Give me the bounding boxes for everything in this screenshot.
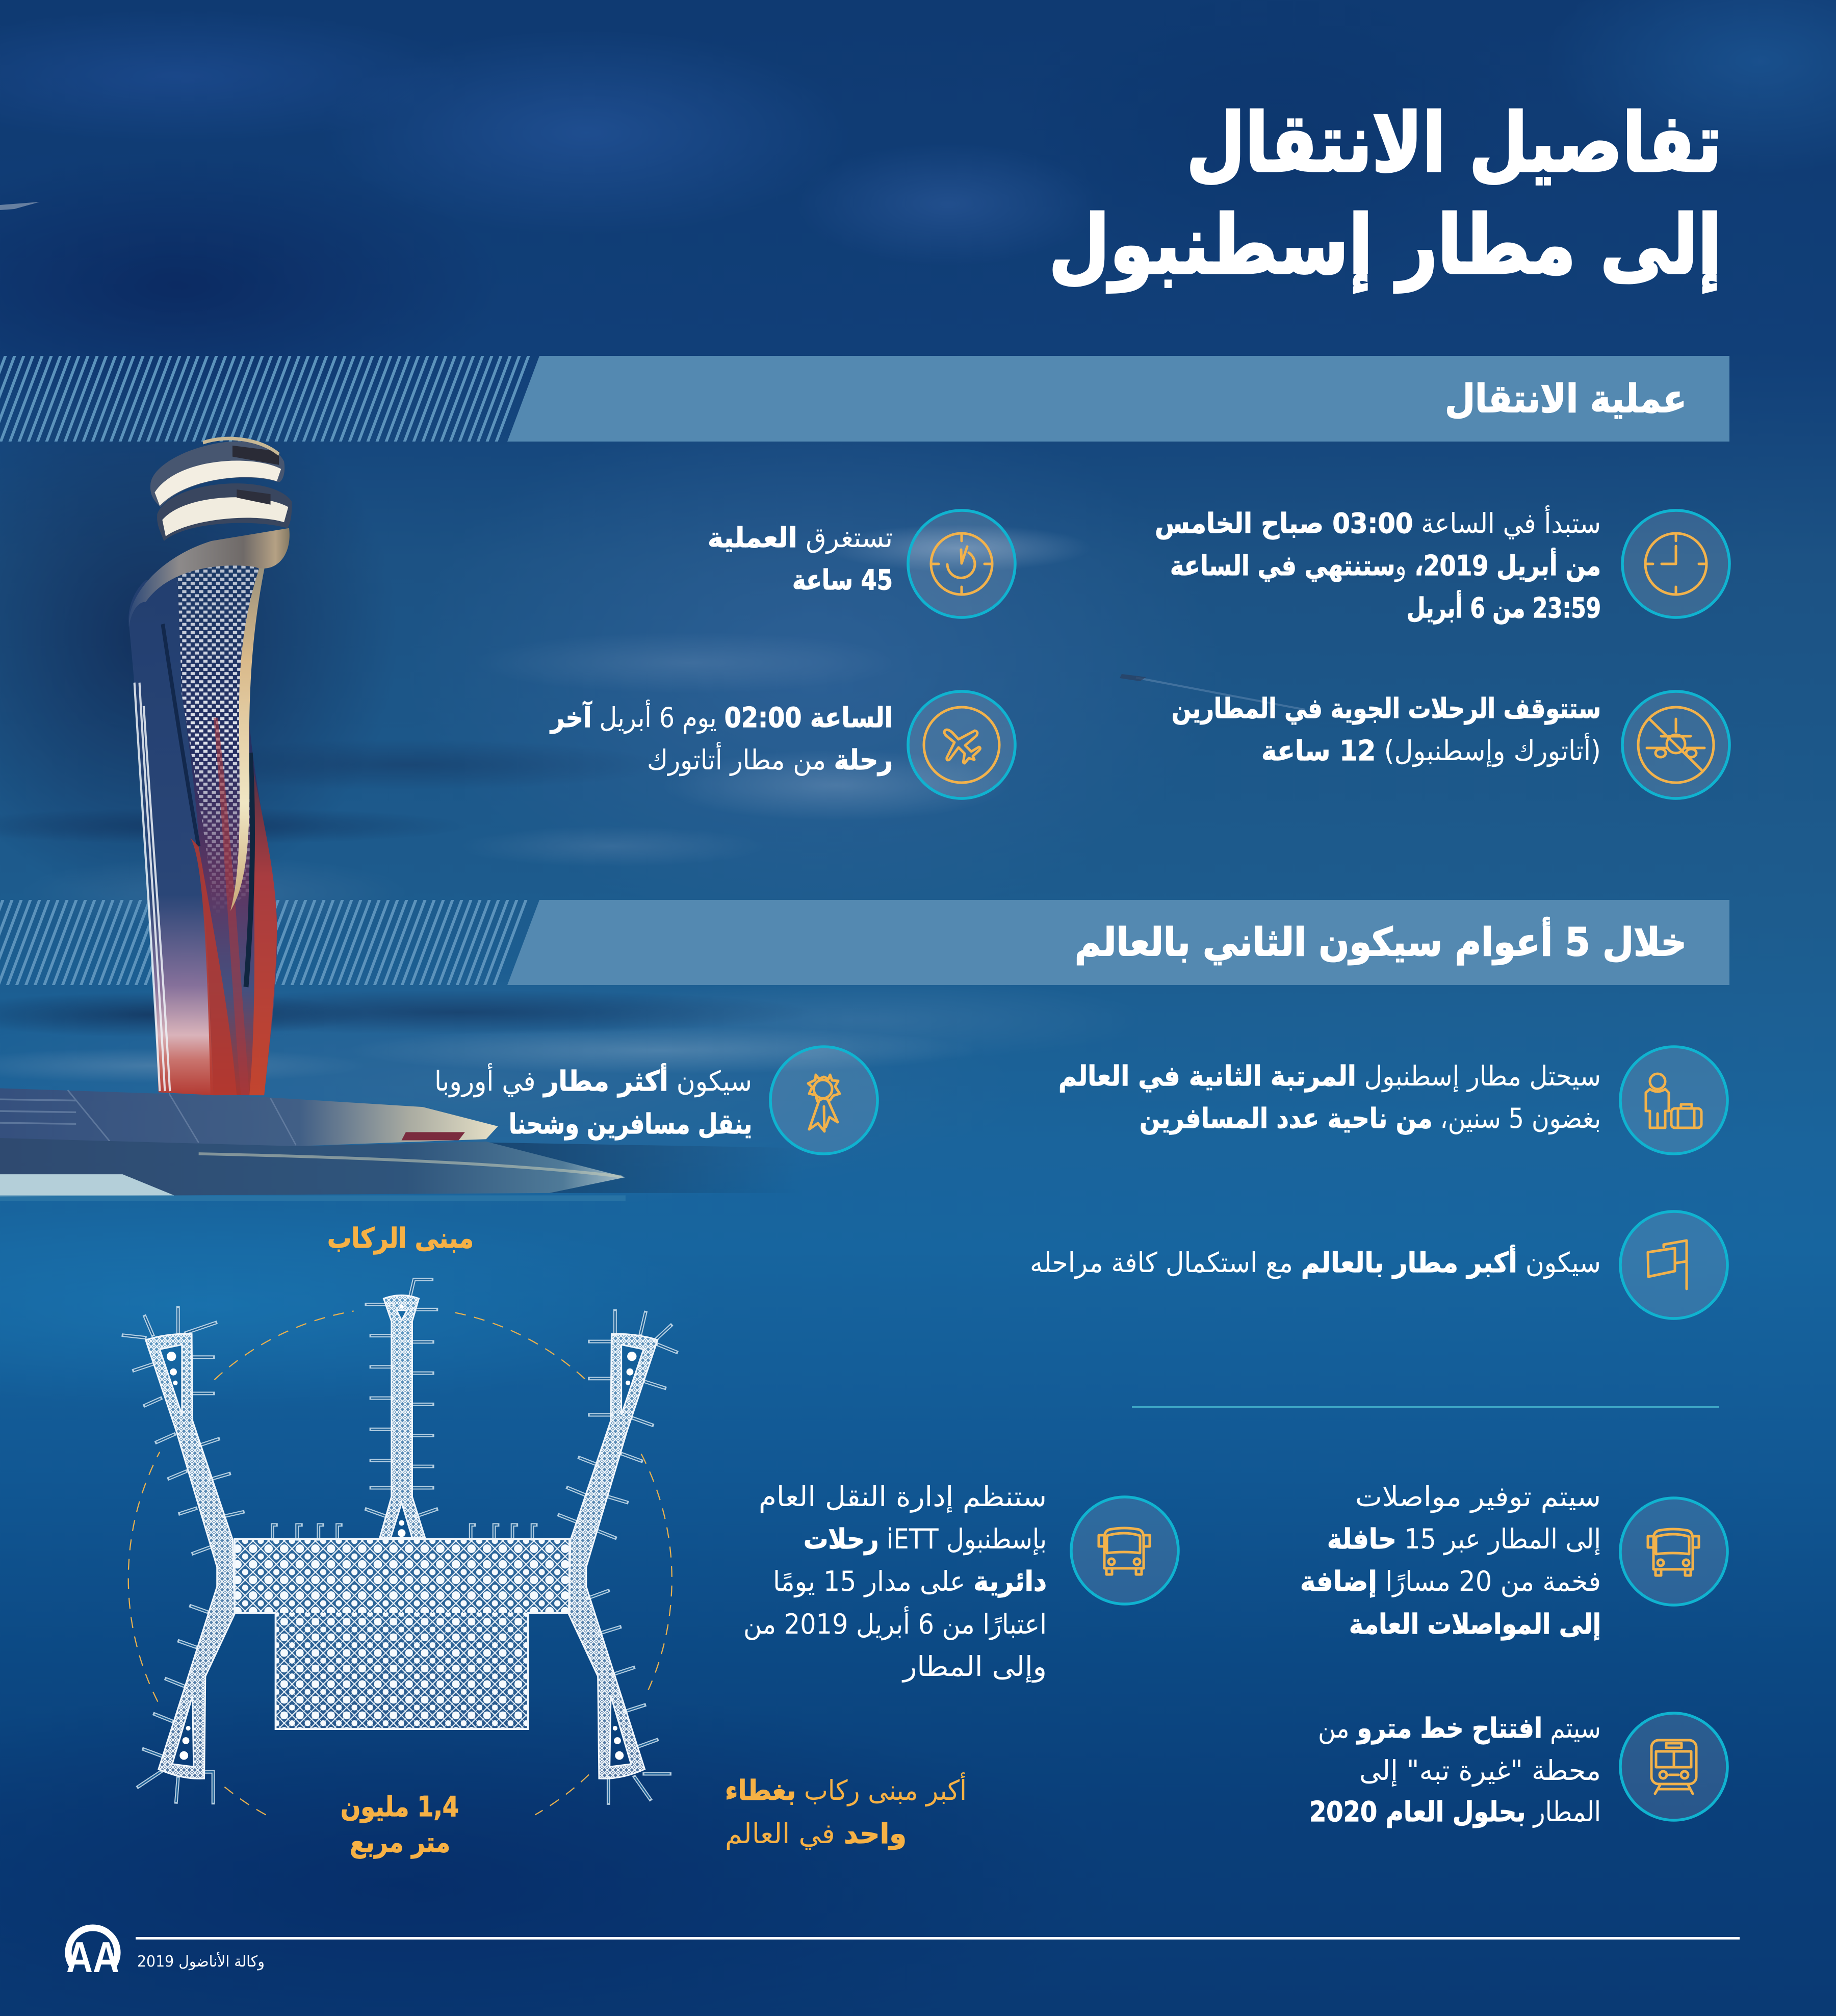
section bar hatch: five years bbox=[0, 900, 530, 985]
text block: second in world: سيحتل مطار إسطنبول المرتبة الثانية في العالم bbox=[1058, 1060, 1601, 1092]
icon: bus bbox=[1620, 1498, 1727, 1605]
logo: AA: AA bbox=[66, 1933, 119, 1982]
text block: last flight: رحلة من مطار أتاتورك bbox=[647, 742, 893, 776]
item: buses to airport bbox=[1300, 1481, 1727, 1640]
title bbox=[1049, 96, 1722, 293]
text block: europe busiest: ينقل مسافرين وشحنا bbox=[509, 1108, 752, 1140]
text block: buses to airport: إلى المواصلات العامة bbox=[1349, 1608, 1601, 1640]
credit: وكالة الأناضول 2019 bbox=[137, 1951, 265, 1971]
title: إلى مطار إسطنبول bbox=[1049, 198, 1722, 293]
left pier bbox=[146, 1334, 235, 1778]
item: second in world bbox=[1058, 1047, 1727, 1154]
terminal upper roof bbox=[0, 1088, 498, 1146]
text block: IETT ring service bbox=[743, 1481, 1047, 1683]
text block: IETT ring service: وإلى المطار bbox=[901, 1650, 1047, 1683]
tower white edge stripes bbox=[135, 683, 170, 1091]
text block: flights halted: (أتاتورك وإسطنبول) 12 ساعة bbox=[1261, 733, 1601, 767]
tower dark seam bbox=[163, 624, 199, 846]
text block: largest airport: سيكون أكبر مطار بالعالم مع استكمال كافة مراحله bbox=[1030, 1245, 1601, 1279]
icon: no plane bbox=[1622, 691, 1729, 798]
dashed circle bbox=[128, 1311, 672, 1815]
tower cream light stripe bbox=[230, 552, 268, 911]
icon: metro train bbox=[1620, 1713, 1727, 1820]
tower collar bbox=[129, 528, 290, 627]
text block: start time: 23:59 من 6 أبريل bbox=[1407, 590, 1601, 624]
tower perforated dots bbox=[177, 565, 262, 908]
right pier bbox=[568, 1334, 658, 1778]
tower red swoosh bbox=[190, 838, 237, 1095]
text block: IETT ring service: اعتبارًا من 6 أبريل 2019 من bbox=[743, 1606, 1047, 1640]
text block: second in world bbox=[1058, 1060, 1601, 1134]
item: largest airport bbox=[1030, 1211, 1727, 1319]
section bar: process bbox=[507, 356, 1729, 442]
text block: second in world: بغضون 5 سنين، من ناحية عدد المسافرين bbox=[1140, 1102, 1601, 1134]
text block: duration: 45 ساعة bbox=[792, 564, 893, 596]
text block: metro line: محطة "غيرة تبه" إلى bbox=[1359, 1754, 1601, 1787]
text block: buses to airport: سيتم توفير مواصلات bbox=[1355, 1481, 1601, 1513]
callout: largest single-roof terminal: واحد في العالم bbox=[725, 1818, 907, 1850]
main hall bbox=[235, 1539, 570, 1729]
callout: largest single-roof terminal: أكبر مبنى ركاب بغطاء bbox=[725, 1772, 967, 1806]
icon: bus bbox=[1071, 1497, 1178, 1604]
icon: flag bbox=[1620, 1211, 1727, 1319]
heading: five years: خلال 5 أعوام سيكون الثاني بالعالم bbox=[1075, 917, 1687, 965]
text block: buses to airport: إلى المطار عبر 15 حافلة bbox=[1327, 1523, 1601, 1555]
icon: plane bbox=[908, 691, 1015, 798]
callout: largest single-roof terminal bbox=[725, 1772, 967, 1850]
divider bbox=[1132, 1406, 1719, 1408]
terminal lower roof bbox=[0, 1138, 626, 1197]
photo: air traffic control tower and terminal bbox=[0, 438, 803, 1201]
text block: europe busiest bbox=[434, 1063, 752, 1140]
text block: duration: تستغرق العملية bbox=[708, 522, 893, 554]
text block: start time: من أبريل 2019، وستنتهي في الساعة bbox=[1170, 548, 1601, 582]
icon: clock bbox=[1622, 510, 1729, 617]
blueprint: terminal floor plan bbox=[123, 1279, 677, 1815]
text block: IETT ring service: ستنظم إدارة النقل العام bbox=[759, 1481, 1047, 1513]
text block: buses to airport: فخمة من 20 مسارًا إضافة bbox=[1300, 1565, 1601, 1597]
terminal red accent bbox=[402, 1132, 465, 1141]
tower upper cab bbox=[150, 438, 285, 507]
tower right red band bbox=[249, 759, 277, 1095]
item: IETT ring service bbox=[743, 1481, 1178, 1683]
tower shaft bbox=[177, 551, 277, 1095]
section bar hatch: process bbox=[0, 356, 530, 442]
plane at left edge bbox=[0, 202, 40, 210]
item: europe busiest bbox=[434, 1047, 877, 1154]
text block: metro line: سيتم افتتاح خط مترو من bbox=[1318, 1712, 1601, 1744]
tower dark seam beside light stripe bbox=[246, 753, 252, 987]
pier lounge dots bbox=[167, 1304, 636, 1760]
footer bbox=[66, 1928, 1740, 1982]
text block: buses to airport bbox=[1300, 1481, 1601, 1640]
item: start time bbox=[1155, 505, 1729, 624]
terminal roof light streak bbox=[199, 1154, 622, 1177]
tower lower cab bbox=[157, 483, 292, 541]
centre pier bbox=[380, 1295, 425, 1538]
label: passenger terminal: مبنى الركاب bbox=[327, 1222, 474, 1254]
terminal water edge bbox=[0, 1195, 626, 1201]
text block: duration bbox=[708, 522, 893, 596]
item: flights halted bbox=[1172, 691, 1729, 798]
label: area 1.4 million square metres: 1,4 مليون bbox=[341, 1791, 459, 1823]
title: تفاصيل الانتقال bbox=[1186, 96, 1722, 190]
item: duration bbox=[708, 510, 1015, 617]
tower left body bbox=[128, 577, 214, 1095]
text block: metro line bbox=[1309, 1712, 1601, 1828]
text block: flights halted bbox=[1172, 692, 1601, 767]
text block: IETT ring service: بإسطنبول iETT رحلات bbox=[804, 1523, 1047, 1555]
label: area 1.4 million square metres bbox=[341, 1791, 459, 1858]
heading: process: عملية الانتقال bbox=[1445, 376, 1687, 421]
text block: IETT ring service: دائرية على مدار 15 يومًا bbox=[773, 1565, 1047, 1597]
terminal: distant land band bbox=[465, 1142, 803, 1193]
label: area 1.4 million square metres: متر مربع bbox=[350, 1826, 450, 1858]
text block: last flight: الساعة 02:00 يوم 6 أبريل آخر bbox=[549, 700, 893, 734]
icon: timer bbox=[908, 510, 1015, 617]
text block: start time bbox=[1155, 505, 1601, 624]
section bar: five years bbox=[507, 900, 1729, 985]
text block: last flight bbox=[549, 700, 893, 776]
item: last flight bbox=[549, 691, 1015, 798]
terminal roof glass lines bbox=[0, 1090, 296, 1145]
terminal glass front bbox=[0, 1174, 174, 1197]
item: metro line bbox=[1309, 1712, 1727, 1828]
text block: start time: ستبدأ في الساعة 03:00 صباح الخامس bbox=[1155, 505, 1601, 539]
gate stubs bbox=[123, 1279, 677, 1803]
icon: award rosette bbox=[770, 1047, 877, 1154]
text block: europe busiest: سيكون أكثر مطار في أوروبا bbox=[434, 1063, 752, 1097]
text block: flights halted: ستتوقف الرحلات الجوية في المطارين bbox=[1172, 692, 1601, 725]
icon: traveller with suitcase bbox=[1620, 1047, 1727, 1154]
text block: metro line: المطار بحلول العام 2020 bbox=[1309, 1796, 1601, 1828]
distant plane with contrail bbox=[1120, 674, 1305, 710]
